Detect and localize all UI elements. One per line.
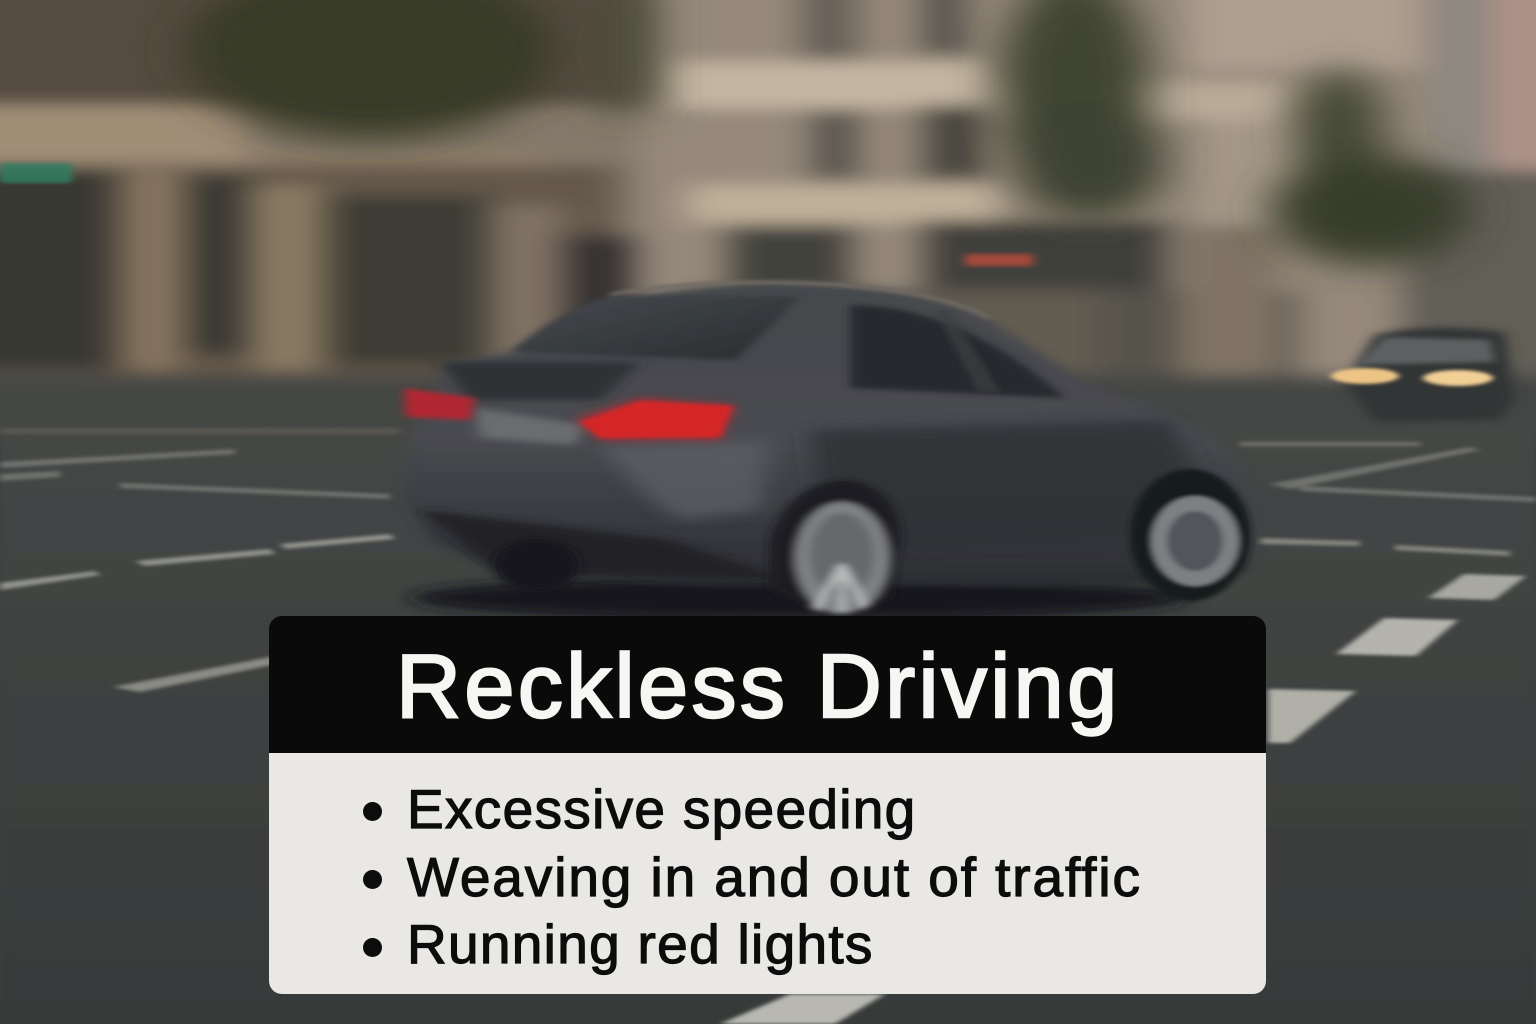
car: side windows bbox=[850, 305, 1065, 398]
car: rear wheel bbox=[770, 480, 900, 615]
bullet 1: Excessive speeding bbox=[407, 778, 917, 840]
bullet 3: Running red lights bbox=[407, 913, 874, 975]
background: trees bbox=[185, 0, 1470, 265]
car: tail lights bbox=[576, 398, 735, 440]
car shadow bbox=[410, 576, 1190, 620]
car bbox=[404, 282, 1252, 615]
road markings bbox=[0, 442, 1536, 1024]
car: trunk lid bbox=[440, 362, 640, 400]
car: lower body bbox=[405, 284, 1252, 585]
car: rear panel highlight bbox=[475, 408, 585, 445]
car: side shade bbox=[810, 420, 1195, 550]
background: buildings bbox=[0, 0, 1536, 435]
car: far rear wheel bbox=[495, 539, 579, 591]
car: rear window bbox=[510, 296, 800, 360]
heading band bbox=[269, 616, 1266, 753]
road surface bbox=[0, 385, 1536, 1024]
oncoming car bbox=[1331, 328, 1515, 422]
caption card bbox=[269, 616, 1266, 994]
bullet 2: Weaving in and out of traffic bbox=[407, 846, 1142, 908]
car: roof highlight bbox=[610, 282, 990, 318]
bullet list panel bbox=[269, 753, 1266, 994]
car: front wheel bbox=[1130, 469, 1250, 601]
title: Reckless Driving bbox=[396, 637, 1121, 737]
